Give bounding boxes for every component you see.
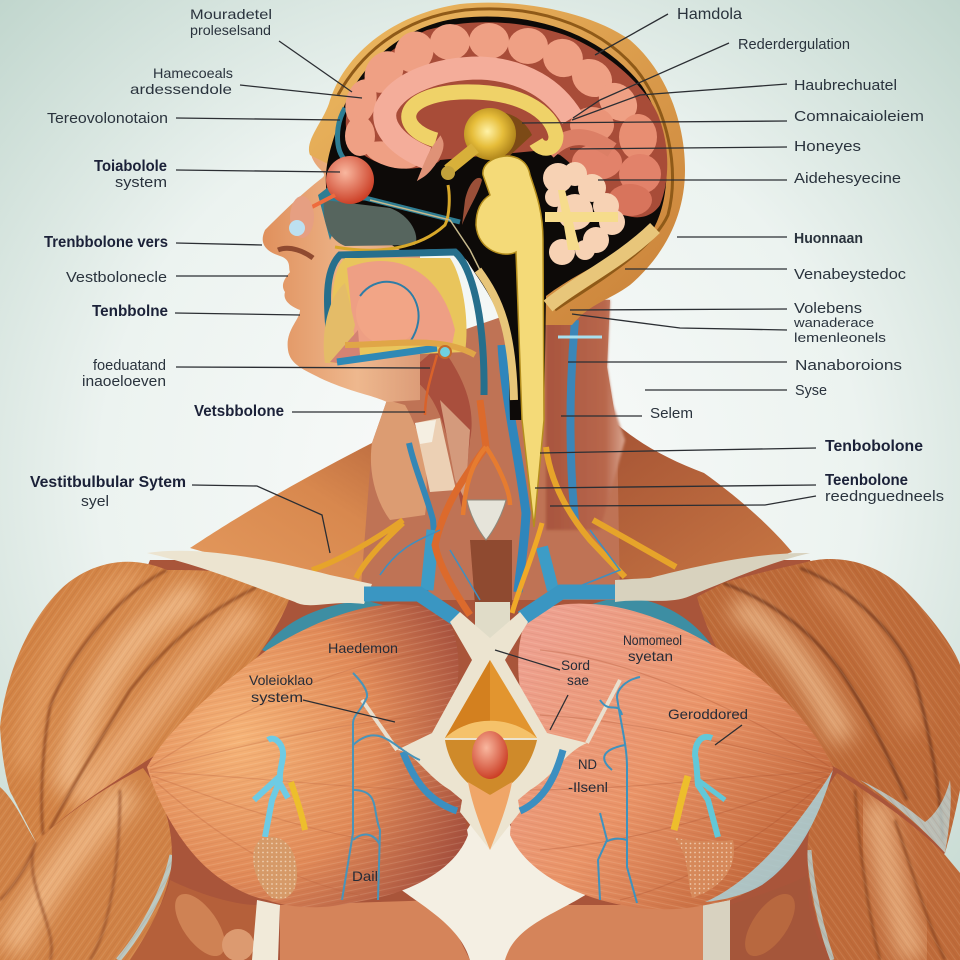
label: Vestitbulbular Sytem: Vestitbulbular Sytem xyxy=(30,474,186,491)
label: sae: sae xyxy=(567,672,589,688)
left leader lines xyxy=(175,41,430,553)
label: Tenbobolone: Tenbobolone xyxy=(825,438,923,455)
label: Honeyes: Honeyes xyxy=(794,138,861,155)
sternum membrane xyxy=(397,612,587,850)
left strap xyxy=(252,900,280,960)
label: Comnaicaioleiem: Comnaicaioleiem xyxy=(794,108,924,125)
label: wanaderace: wanaderace xyxy=(793,315,874,330)
label: Hamdola: Hamdola xyxy=(677,6,742,23)
label: Voleioklao: Voleioklao xyxy=(249,672,313,688)
left chest vessels xyxy=(342,673,420,900)
thalamus xyxy=(464,108,516,160)
label: Aidehesyecine: Aidehesyecine xyxy=(794,170,901,187)
right trapezius xyxy=(545,420,792,590)
left neck muscle xyxy=(371,400,427,520)
lower chest and abdomen xyxy=(125,825,830,960)
pink fold xyxy=(422,140,441,175)
yellow arc xyxy=(409,92,556,148)
left deltoid xyxy=(0,550,300,850)
label: Trenbbolone vers: Trenbbolone vers xyxy=(44,234,168,251)
right strap xyxy=(703,900,730,960)
central throat muscle xyxy=(470,540,512,605)
label: Toiabolole: Toiabolole xyxy=(94,158,167,175)
spinal cord and brainstem xyxy=(476,156,582,527)
label: system: system xyxy=(115,174,167,191)
face skin xyxy=(263,150,420,402)
label: Vetsbbolone: Vetsbbolone xyxy=(194,403,284,420)
right leader lines xyxy=(522,14,816,506)
orange triangle xyxy=(445,660,537,738)
label: Hamecoeals: Hamecoeals xyxy=(153,65,233,81)
red bulb xyxy=(472,731,508,779)
left blue collar vessel xyxy=(364,594,458,620)
label: Geroddored: Geroddored xyxy=(668,706,748,722)
mouth blue lining xyxy=(327,252,484,395)
brain xyxy=(341,22,667,217)
label: Selem: Selem xyxy=(650,405,693,422)
tongue oval xyxy=(356,281,420,345)
label: Nomomeol: Nomomeol xyxy=(623,632,682,648)
eye globe xyxy=(326,156,374,204)
right chest vessels xyxy=(598,677,640,903)
label: Vestbolonecle: Vestbolonecle xyxy=(66,269,167,286)
right pectoral xyxy=(510,604,833,909)
mouth interior xyxy=(331,258,467,358)
icon: left blue gland xyxy=(253,739,305,899)
left collar xyxy=(147,551,372,605)
right blue collar vessel xyxy=(522,592,615,618)
label: syel: syel xyxy=(81,493,109,510)
throat cream square xyxy=(475,602,510,638)
torso base xyxy=(36,560,945,960)
label: proleselsand: proleselsand xyxy=(190,22,271,38)
pale blue pectoral rim xyxy=(705,770,833,902)
label: inaoeloeven: inaoeloeven xyxy=(82,373,166,390)
right pectoral fibres xyxy=(530,650,830,900)
neck vessels xyxy=(312,320,676,615)
left trapezius xyxy=(190,443,420,590)
cerebellum tree xyxy=(543,162,625,265)
lower cup xyxy=(445,740,537,795)
label: ardessendole: ardessendole xyxy=(130,81,232,97)
label: system chest: system xyxy=(251,689,303,705)
label: ND: ND xyxy=(578,756,597,772)
label: Syse: Syse xyxy=(795,382,827,399)
yellow nerve outline xyxy=(335,185,449,250)
label: Sord: Sord xyxy=(561,657,590,673)
skull outer band xyxy=(309,3,685,325)
neck deep muscle xyxy=(405,345,472,510)
label: Rederdergulation: Rederdergulation xyxy=(738,36,850,53)
label: Haedemon: Haedemon xyxy=(328,640,398,656)
label: Volebens: Volebens xyxy=(794,300,862,317)
jaw muscle xyxy=(330,330,360,364)
skull dark suture xyxy=(338,9,673,310)
nostril xyxy=(278,248,313,258)
label: Mouradetel: Mouradetel xyxy=(190,6,272,22)
icon: right blue gland xyxy=(673,737,734,898)
label: Tereovolonotaion: Tereovolonotaion xyxy=(47,110,168,127)
label: syetan: syetan xyxy=(628,648,673,664)
torso muscles xyxy=(0,420,960,960)
label: reednguedneels: reednguedneels xyxy=(825,488,944,505)
left pectoral xyxy=(147,604,468,907)
nasal structure xyxy=(310,195,335,208)
label: foeduatand: foeduatand xyxy=(93,357,166,374)
right collar xyxy=(615,553,810,602)
label: Huonnaan: Huonnaan xyxy=(794,230,863,247)
blue curves xyxy=(403,750,563,811)
jaw bar xyxy=(337,348,437,362)
thyroid cup xyxy=(467,500,506,540)
right deltoid xyxy=(690,550,960,860)
label: Tenbbolne: Tenbbolne xyxy=(92,303,168,320)
blue nasal dot xyxy=(289,220,305,236)
blue vessels above chest xyxy=(262,596,715,665)
neck xyxy=(312,300,676,615)
lower right gyrus xyxy=(548,137,612,152)
occipital gold layer xyxy=(548,228,655,306)
pituitary stalk xyxy=(448,148,475,170)
label: -Ilsenl: -Ilsenl xyxy=(568,779,608,795)
collarbones and sternum xyxy=(147,551,810,850)
left pectoral fibres xyxy=(150,650,450,895)
gray sinus xyxy=(324,200,416,246)
black cranial cavity xyxy=(326,16,666,420)
left upper arm xyxy=(0,768,180,960)
right upper arm xyxy=(800,770,960,960)
label: Venabeystedoc: Venabeystedoc xyxy=(794,266,907,283)
label: lemenleonels: lemenleonels xyxy=(794,330,887,345)
inner pink arc xyxy=(385,68,572,158)
head xyxy=(263,3,685,527)
neck tendon xyxy=(415,418,456,492)
lower orange point xyxy=(468,782,512,850)
label: Dail: Dail xyxy=(352,868,378,884)
abdomen membrane xyxy=(395,825,590,960)
neck right muscle xyxy=(546,300,625,530)
chest leader lines xyxy=(303,650,742,745)
teal sinus lining xyxy=(322,108,460,222)
label: Haubrechuatel: Haubrechuatel xyxy=(794,77,897,94)
label: Nanaboroions: Nanaboroions xyxy=(795,357,902,374)
label: Teenbolone: Teenbolone xyxy=(825,472,908,489)
outer gyri xyxy=(341,23,661,216)
